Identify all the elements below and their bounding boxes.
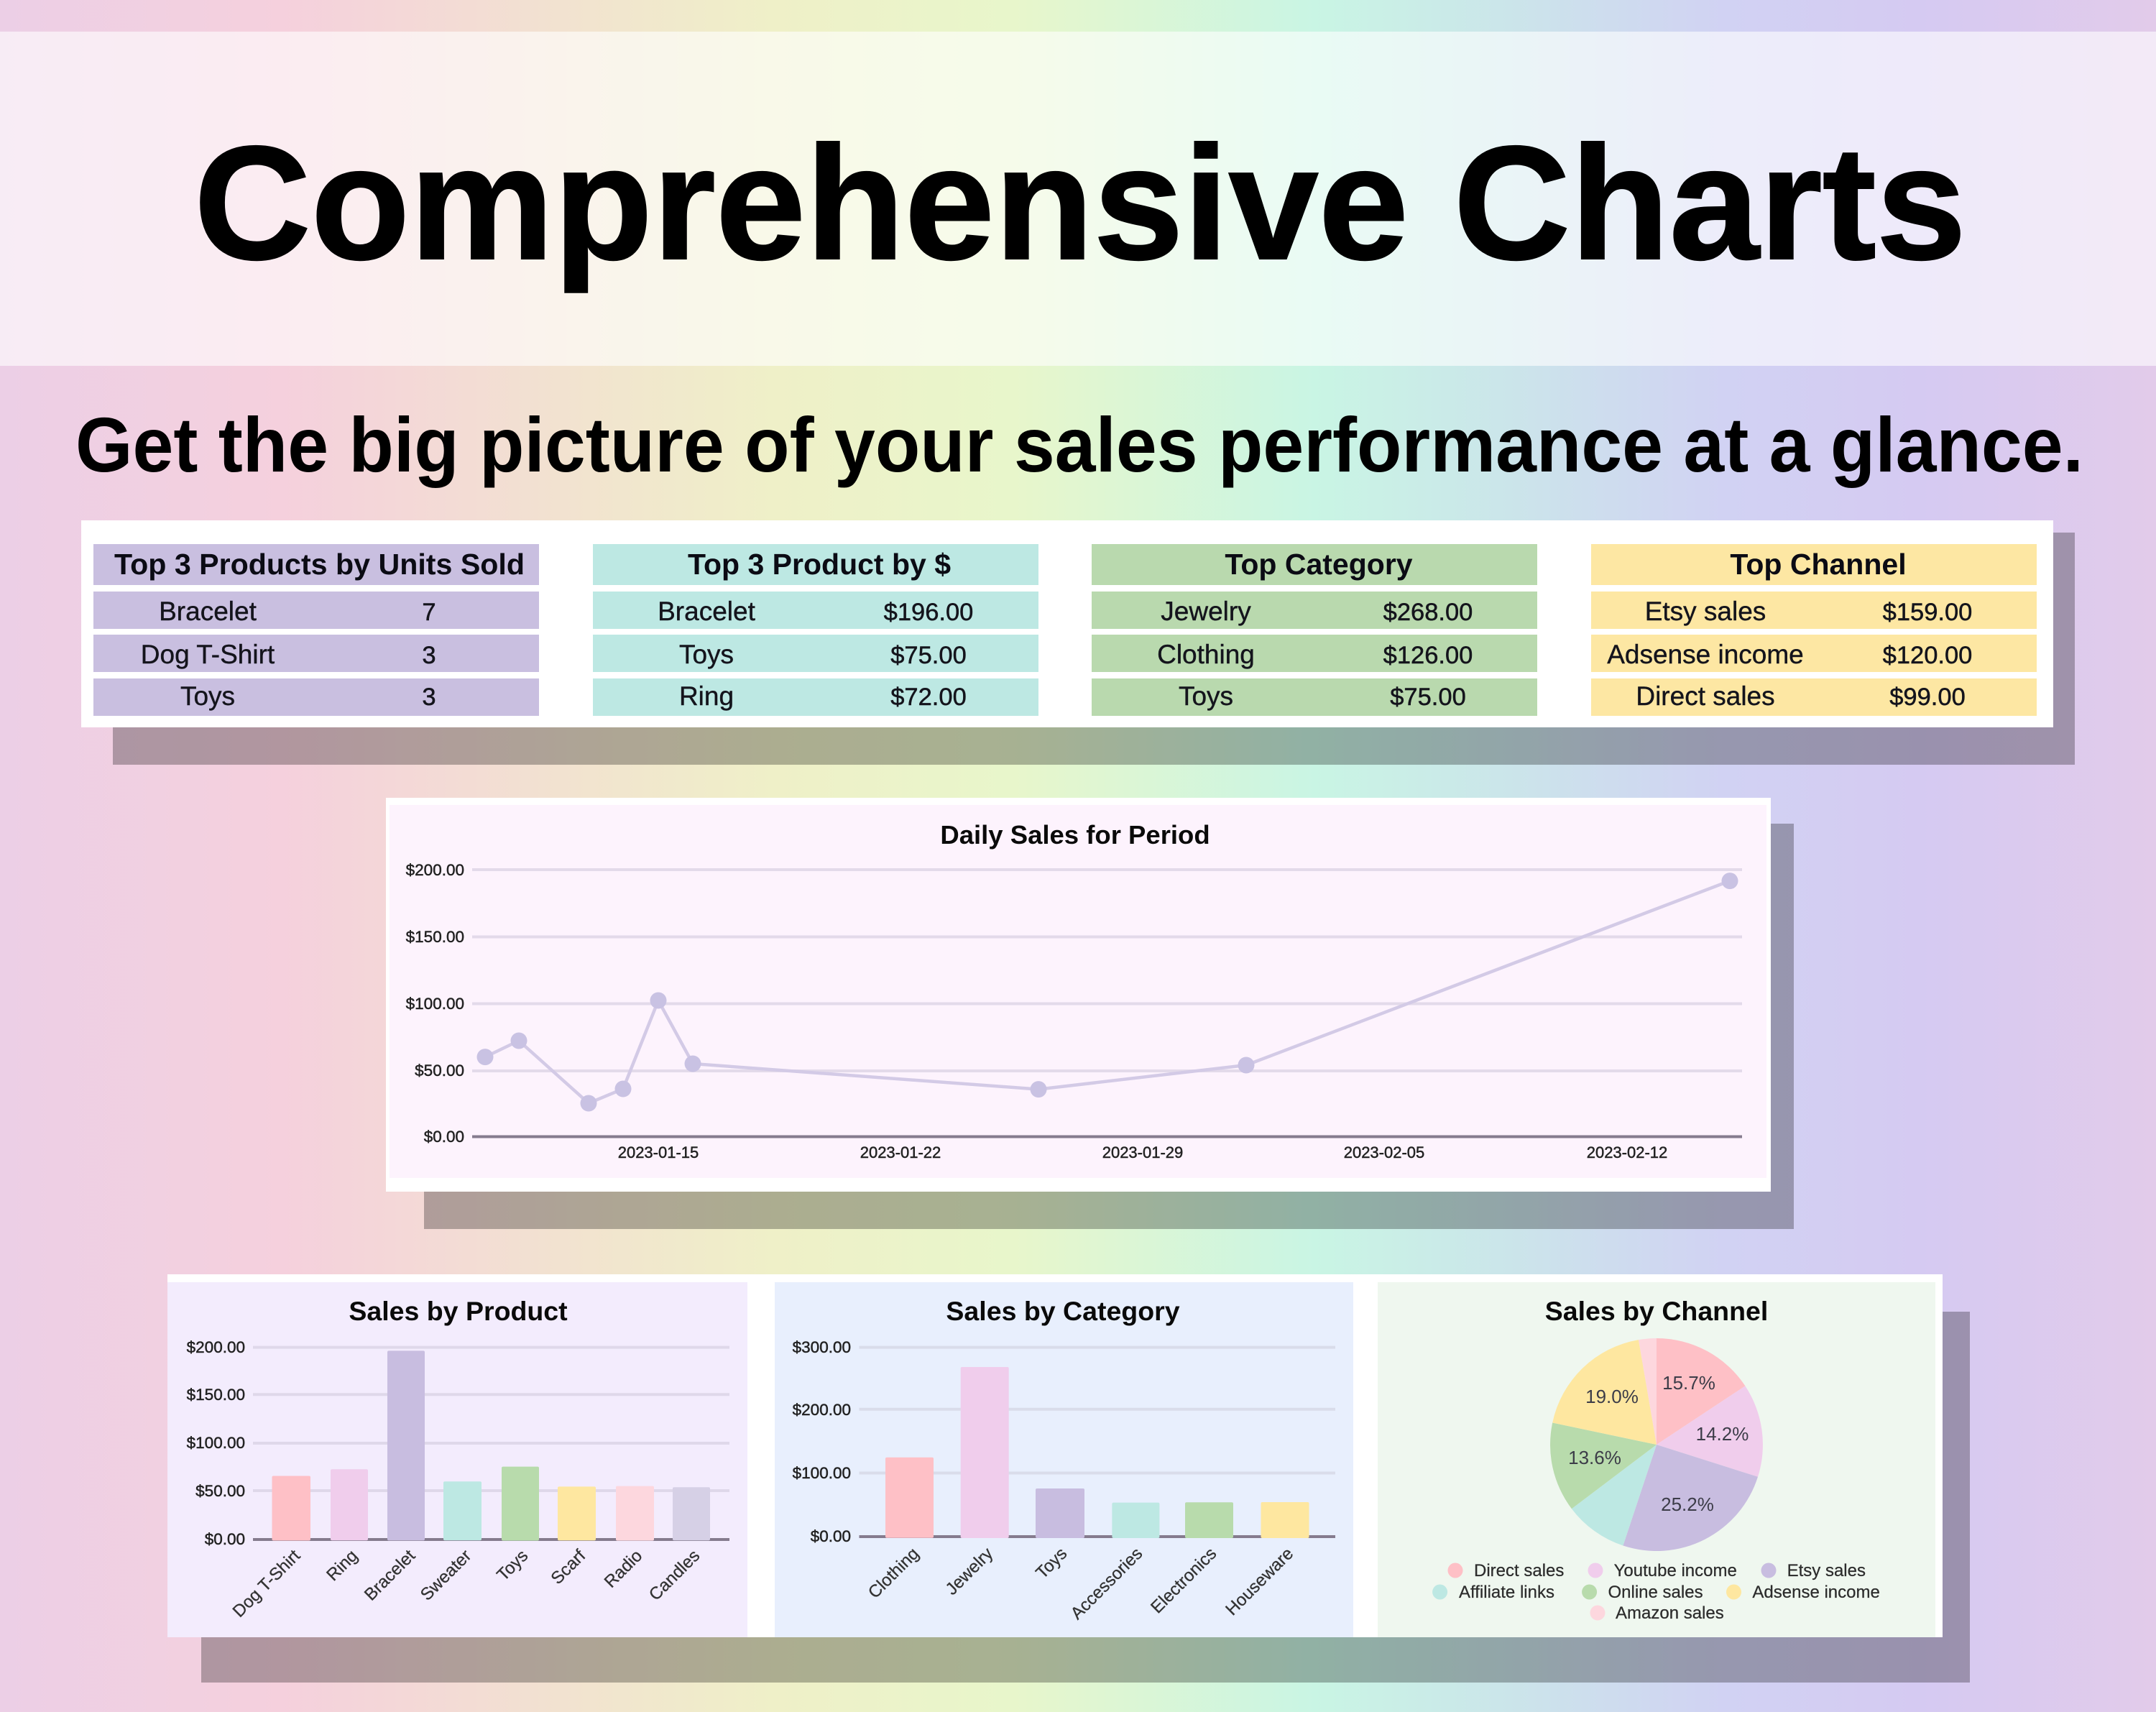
pie slices: 25.2% bbox=[1661, 1494, 1714, 1515]
table: top products by units bbox=[93, 544, 539, 716]
panel: bottom charts bbox=[167, 1274, 1970, 1683]
table: top channel: Direct sales bbox=[1636, 681, 1775, 711]
line chart plot: 2023-01-22 bbox=[860, 1143, 941, 1161]
legend: Adsense income bbox=[1752, 1583, 1880, 1602]
chart: sales by product: $100.00 bbox=[187, 1434, 245, 1452]
table: top channel: Adsense income bbox=[1607, 640, 1804, 669]
table: top channel: $159.00 bbox=[1883, 599, 1972, 626]
pie slices bbox=[1550, 1338, 1763, 1551]
panel: daily sales line chart bbox=[386, 798, 1794, 1229]
table: top category: Jewelry bbox=[1161, 597, 1251, 626]
chart: sales by product: Dog T-Shirt bbox=[229, 1546, 304, 1621]
table: top category: $126.00 bbox=[1383, 642, 1473, 669]
table: top category: Clothing bbox=[1157, 640, 1255, 669]
title banner bbox=[0, 32, 2156, 366]
table: top channel bbox=[1591, 544, 2037, 716]
table: top category: $268.00 bbox=[1383, 599, 1473, 626]
chart: sales by category: Houseware bbox=[1222, 1544, 1297, 1619]
chart: sales by category: $200.00 bbox=[793, 1401, 851, 1419]
chart: sales by category bbox=[775, 1282, 1353, 1637]
legend: Amazon sales bbox=[1616, 1603, 1724, 1623]
chart: sales by product: Ring bbox=[323, 1546, 361, 1585]
table: top products by units: 7 bbox=[422, 599, 436, 626]
chart: sales by category: Sales by Category bbox=[946, 1296, 1180, 1326]
chart: sales by category: $300.00 bbox=[793, 1338, 851, 1356]
chart: sales by product: Sweater bbox=[417, 1546, 475, 1605]
line chart plot: 2023-02-12 bbox=[1587, 1143, 1667, 1161]
pie slices: 19.0% bbox=[1585, 1386, 1639, 1407]
table: top products by units: Dog T-Shirt bbox=[141, 640, 275, 669]
line chart plot: $50.00 bbox=[415, 1062, 464, 1080]
line chart plot: 2023-01-15 bbox=[618, 1143, 699, 1161]
table: top channel: $120.00 bbox=[1883, 642, 1972, 669]
legend: Direct sales bbox=[1474, 1561, 1564, 1580]
line chart plot: $100.00 bbox=[406, 995, 464, 1013]
table: top products by dollars: Top 3 Product by $ bbox=[688, 548, 951, 581]
chart: sales by product: Scarf bbox=[548, 1546, 589, 1588]
chart: sales by product: Sales by Product bbox=[349, 1296, 568, 1326]
line chart plot: $0.00 bbox=[424, 1128, 464, 1146]
chart: sales by product: $200.00 bbox=[187, 1338, 245, 1356]
pie slices: 14.2% bbox=[1696, 1423, 1749, 1445]
chart: sales by channel pie bbox=[1378, 1282, 1935, 1637]
table: top products by units: Top 3 Products by Units Sold bbox=[114, 548, 525, 581]
title: Comprehensive Charts bbox=[194, 112, 1966, 293]
table: top products by dollars: Bracelet bbox=[658, 597, 756, 626]
chart title: Daily Sales for Period bbox=[940, 820, 1210, 850]
chart: sales by product: $0.00 bbox=[205, 1530, 245, 1548]
legend: Affiliate links bbox=[1459, 1583, 1554, 1602]
table: top products by dollars: Ring bbox=[679, 681, 734, 711]
chart: sales by product bbox=[167, 1282, 747, 1637]
chart: sales by category: Clothing bbox=[865, 1544, 923, 1603]
pie slices: 15.7% bbox=[1662, 1372, 1715, 1394]
chart: sales by category: Accessories bbox=[1067, 1544, 1146, 1624]
table: top products by dollars: Toys bbox=[679, 640, 734, 669]
legend: Etsy sales bbox=[1787, 1561, 1866, 1580]
chart: sales by channel pie: Sales by Channel bbox=[1545, 1296, 1768, 1326]
chart: sales by category: Electronics bbox=[1147, 1544, 1220, 1617]
line chart plot: 2023-01-29 bbox=[1102, 1143, 1183, 1161]
line chart plot: $150.00 bbox=[406, 928, 464, 946]
chart: sales by product: Toys bbox=[493, 1546, 532, 1585]
legend: Youtube income bbox=[1614, 1561, 1737, 1580]
chart: sales by product: Radio bbox=[601, 1546, 646, 1592]
legend: Online sales bbox=[1608, 1583, 1703, 1602]
table: top category: $75.00 bbox=[1390, 684, 1466, 711]
table: top products by dollars: $196.00 bbox=[884, 599, 973, 626]
table: top channel: $99.00 bbox=[1889, 684, 1966, 711]
pie slices: 13.6% bbox=[1568, 1447, 1621, 1468]
table: top channel: Top Channel bbox=[1730, 548, 1907, 581]
panel: top lists bbox=[81, 520, 2075, 765]
legend bbox=[1432, 1561, 1880, 1623]
table: top category: Toys bbox=[1179, 681, 1233, 711]
line chart plot bbox=[406, 861, 1742, 1161]
table: top products by units: 3 bbox=[422, 684, 436, 711]
table: top products by units: 3 bbox=[422, 642, 436, 669]
chart: sales by category: Toys bbox=[1032, 1544, 1071, 1583]
subtitle: Get the big picture of your sales performance at a glance. bbox=[75, 401, 2083, 488]
table: top products by units: Toys bbox=[180, 681, 235, 711]
table: top category bbox=[1092, 544, 1537, 716]
table: top products by dollars: $72.00 bbox=[890, 684, 967, 711]
chart: sales by product: Candles bbox=[645, 1546, 704, 1605]
line chart plot: 2023-02-05 bbox=[1344, 1143, 1424, 1161]
table: top category: Top Category bbox=[1225, 548, 1413, 581]
line chart plot: $200.00 bbox=[406, 861, 464, 879]
chart: sales by category: $100.00 bbox=[793, 1464, 851, 1482]
table: top products by dollars bbox=[593, 544, 1038, 716]
table: top products by dollars: $75.00 bbox=[890, 642, 967, 669]
table: top channel: Etsy sales bbox=[1645, 597, 1766, 626]
table: top products by units: Bracelet bbox=[159, 597, 257, 626]
chart: sales by product: $50.00 bbox=[195, 1482, 245, 1500]
chart: sales by category: Jewelry bbox=[942, 1544, 997, 1599]
chart: sales by product: Bracelet bbox=[361, 1546, 419, 1605]
chart: sales by category: $0.00 bbox=[811, 1527, 851, 1545]
chart: sales by product: $150.00 bbox=[187, 1386, 245, 1404]
